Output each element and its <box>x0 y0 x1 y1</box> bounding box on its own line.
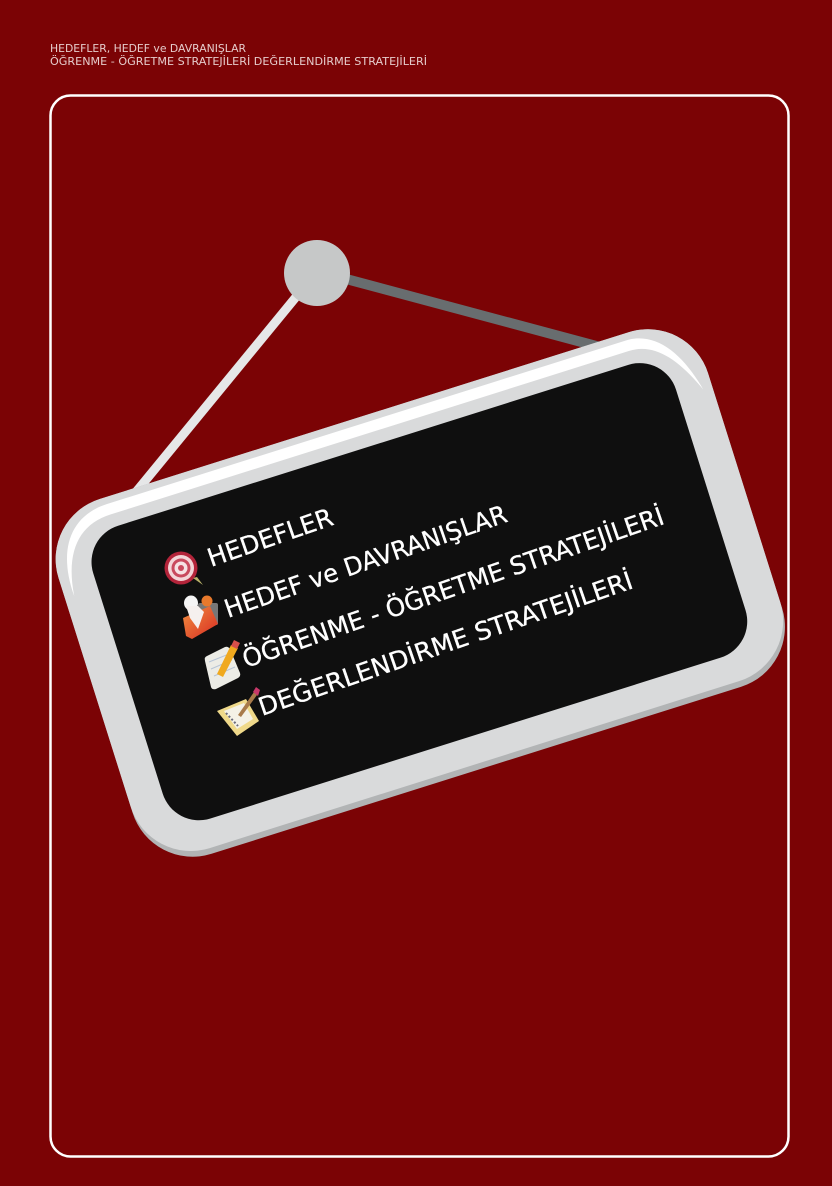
blackboard <box>82 353 757 830</box>
header text <box>50 42 427 68</box>
sign board <box>40 313 801 873</box>
pin <box>284 240 350 306</box>
icon: notepad and pencil <box>217 687 260 736</box>
sign text lines: DEĞERLENDİRME STRATEJİLERİ <box>254 565 636 722</box>
hanging strings <box>136 276 600 492</box>
icon: paper and pencil <box>205 640 240 689</box>
header text: HEDEFLER, HEDEF ve DAVRANIŞLAR <box>50 42 246 55</box>
panel: white rounded frame <box>50 96 788 1156</box>
header text: ÖĞRENME - ÖĞRETME STRATEJİLERİ DEĞERLENDİRME STRATEJİLERİ <box>50 55 427 68</box>
sign text lines: ÖĞRENME - ÖĞRETME STRATEJİLERİ <box>238 501 668 674</box>
icon: people <box>183 596 218 639</box>
sign text lines: HEDEF ve DAVRANIŞLAR <box>221 500 511 624</box>
icon: target <box>164 552 203 585</box>
sign text lines: HEDEFLER <box>204 503 337 573</box>
